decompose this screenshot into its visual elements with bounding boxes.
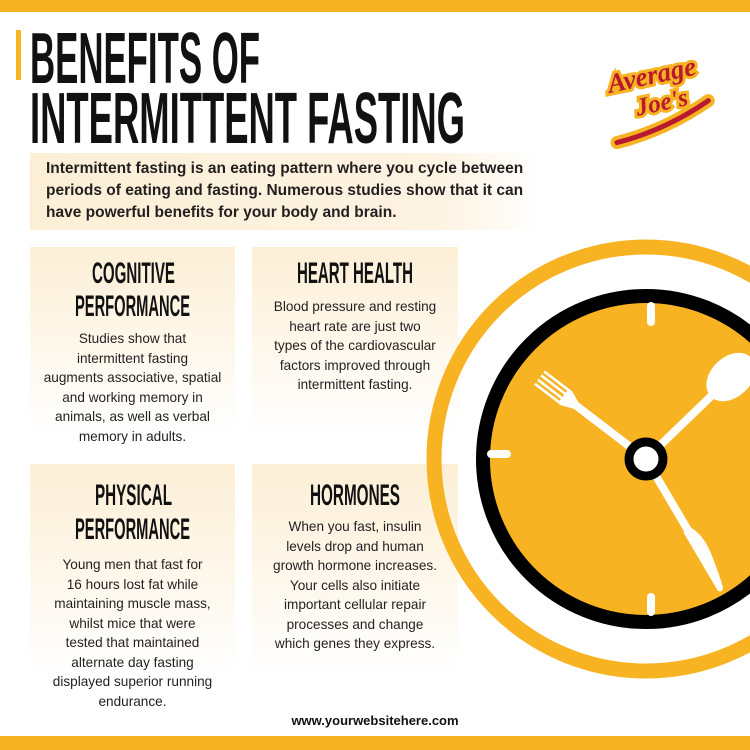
body: hormones: processes and change — [287, 616, 423, 632]
logo — [603, 51, 715, 150]
body: cognitive: animals, as well as verbal — [55, 409, 210, 424]
body: hormones: When you fast, insulin — [288, 519, 421, 534]
body: cognitive: memory in adults. — [79, 428, 186, 444]
body: heart: Blood pressure and resting — [274, 299, 436, 314]
panel: physical performance — [30, 464, 235, 690]
body: physical: maintaining muscle mass, — [54, 596, 211, 611]
body: hormones: levels drop and human — [286, 538, 424, 554]
body: heart: heart rate are just two — [289, 318, 421, 334]
body: heart: intermittent fasting. — [298, 377, 412, 392]
body: physical — [53, 557, 212, 708]
body: hormones: important cellular repair — [284, 597, 426, 612]
body: heart: factors improved through — [280, 358, 430, 372]
body: hormones — [273, 519, 437, 651]
body: heart: types of the cardiovascular — [274, 338, 436, 353]
footer url: www.yourwebsitehere.com — [291, 713, 459, 728]
body: physical: alternate day fasting — [71, 654, 194, 670]
title accent bar — [16, 30, 21, 80]
logo: Average — [603, 51, 699, 99]
body: physical: 16 hours lost fat while — [67, 576, 198, 592]
bottom bar — [0, 736, 750, 750]
body: physical: whilst mice that were — [69, 616, 196, 630]
heading: physical performance — [75, 479, 190, 544]
body: hormones: Your cells also initiate — [290, 578, 420, 592]
body: cognitive: and working memory in — [62, 390, 203, 404]
top bar — [0, 0, 750, 12]
intro text block: Intermittent fasting is an eating pattern where you cycle between periods of eating and fasting. Numerous studies show that it can have powerful benefits for your body and brain. — [46, 160, 523, 221]
body: cognitive: intermittent fasting — [77, 350, 188, 366]
body: cognitive: augments associative, spatial — [44, 370, 221, 385]
body: hormones: growth hormone increases. — [273, 558, 437, 573]
body: heart — [274, 299, 436, 392]
panel: cognitive performance — [30, 247, 235, 447]
body: physical: Young men that fast for — [62, 557, 203, 572]
body: cognitive: Studies show that — [79, 331, 186, 346]
logo: Joe's — [632, 84, 690, 122]
body: physical: displayed superior running — [53, 674, 212, 689]
heading: cognitive performance — [75, 257, 190, 323]
body: physical: tested that maintained — [66, 635, 199, 650]
panel: hormones — [252, 464, 458, 690]
body: cognitive — [44, 331, 221, 444]
body: hormones: which genes they express. — [275, 636, 435, 651]
spoon — [632, 343, 750, 473]
fork — [534, 370, 651, 466]
body: physical: endurance. — [98, 694, 167, 708]
panel: heart health — [252, 247, 458, 447]
knife — [642, 454, 731, 593]
title — [30, 19, 465, 150]
